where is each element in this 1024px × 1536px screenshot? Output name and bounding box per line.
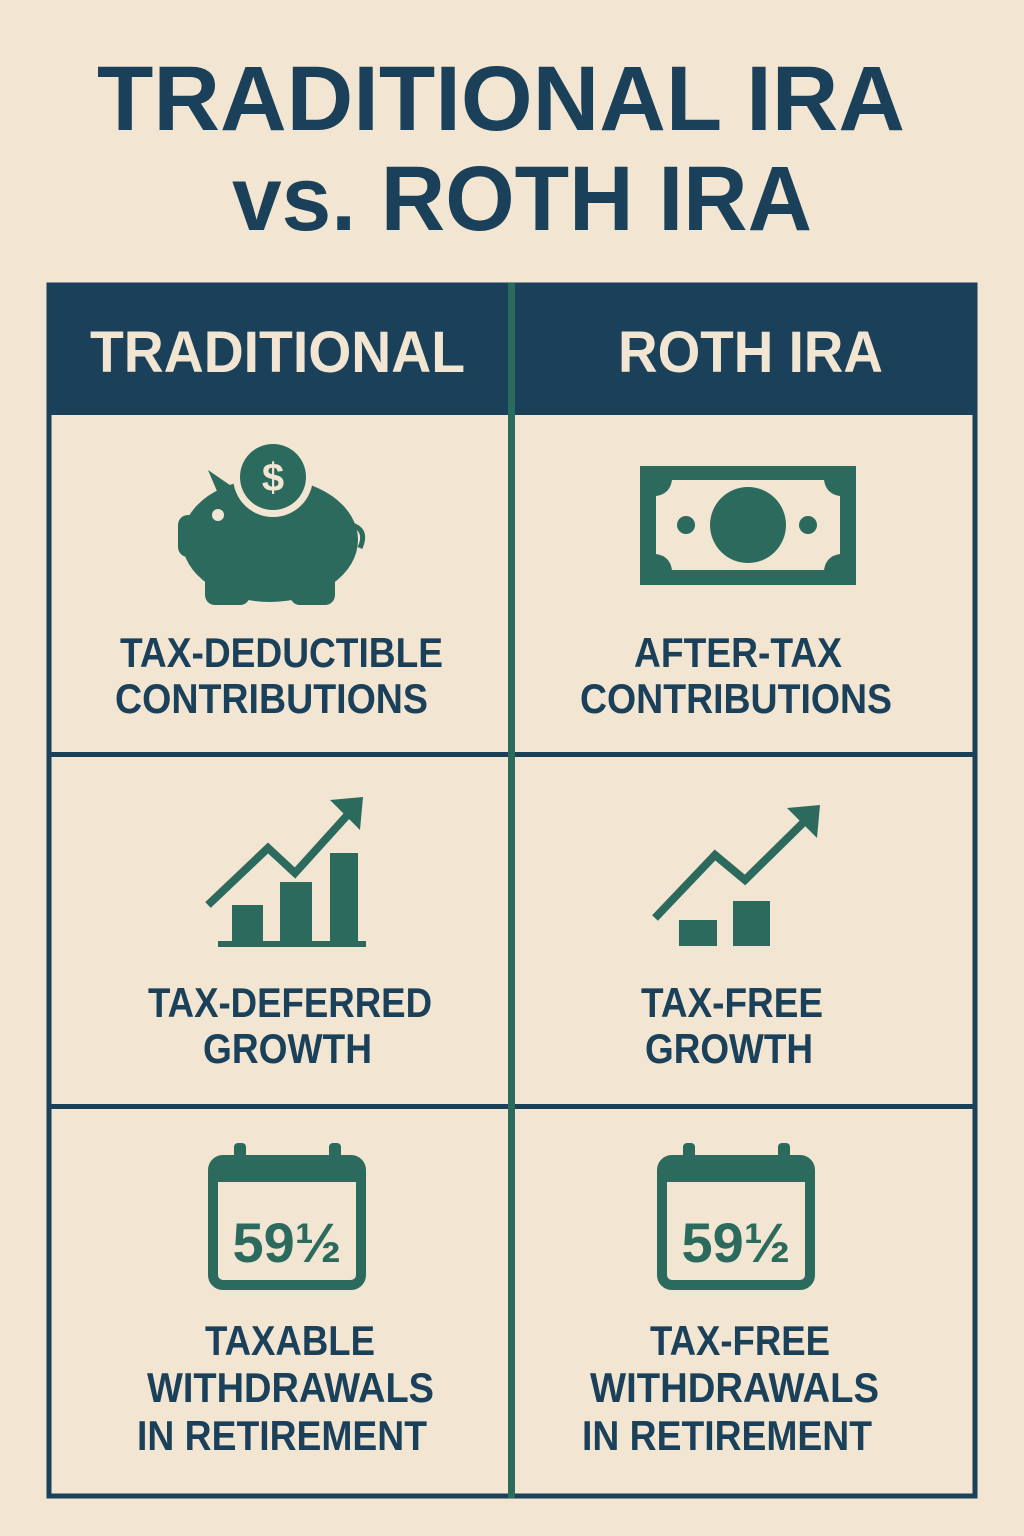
label: IN RETIREMENT bbox=[137, 1412, 427, 1459]
cell: traditional contributions bbox=[115, 437, 443, 722]
label bbox=[115, 629, 443, 722]
cell: roth withdrawals bbox=[582, 1143, 879, 1459]
label: TAX-DEDUCTIBLE bbox=[120, 629, 443, 676]
title bbox=[97, 48, 905, 250]
title: TRADITIONAL IRA bbox=[97, 48, 905, 150]
label: GROWTH bbox=[645, 1025, 813, 1072]
label bbox=[641, 979, 823, 1072]
icon: calendar 59 1/2: 59½ bbox=[682, 1211, 790, 1274]
header row: ROTH IRA bbox=[618, 320, 883, 385]
icon: calendar 59 1/2 bbox=[662, 1143, 810, 1285]
icon: growth chart bbox=[655, 805, 820, 946]
cell: traditional withdrawals bbox=[137, 1143, 434, 1459]
cell: roth contributions bbox=[580, 466, 892, 722]
cell: roth growth bbox=[641, 805, 823, 1072]
icon: piggy bank: $ bbox=[262, 456, 284, 500]
icon: calendar 59 1/2: 59½ bbox=[232, 1211, 342, 1274]
icon: calendar 59 1/2 bbox=[213, 1143, 361, 1285]
cell: traditional growth bbox=[148, 797, 432, 1072]
label bbox=[148, 979, 432, 1072]
label bbox=[582, 1317, 879, 1459]
label: WITHDRAWALS bbox=[147, 1364, 434, 1411]
icon: bar chart with arrow bbox=[208, 797, 366, 947]
label: GROWTH bbox=[203, 1025, 372, 1072]
label: TAX-FREE bbox=[641, 979, 823, 1026]
label: CONTRIBUTIONS bbox=[580, 675, 892, 722]
label: TAXABLE bbox=[205, 1317, 375, 1364]
label: TAX-DEFERRED bbox=[148, 979, 432, 1026]
icon: piggy bank bbox=[178, 437, 363, 605]
title: vs. ROTH IRA bbox=[232, 148, 812, 250]
label: IN RETIREMENT bbox=[582, 1412, 872, 1459]
icon: dollar bill bbox=[640, 466, 856, 585]
header row bbox=[47, 283, 977, 415]
label: WITHDRAWALS bbox=[590, 1364, 879, 1411]
label bbox=[580, 629, 892, 722]
label bbox=[137, 1317, 434, 1459]
label: AFTER-TAX bbox=[634, 629, 842, 676]
comparison table bbox=[47, 283, 977, 1498]
label: CONTRIBUTIONS bbox=[115, 675, 428, 722]
header row: TRADITIONAL bbox=[90, 320, 465, 385]
label: TAX-FREE bbox=[650, 1317, 830, 1364]
